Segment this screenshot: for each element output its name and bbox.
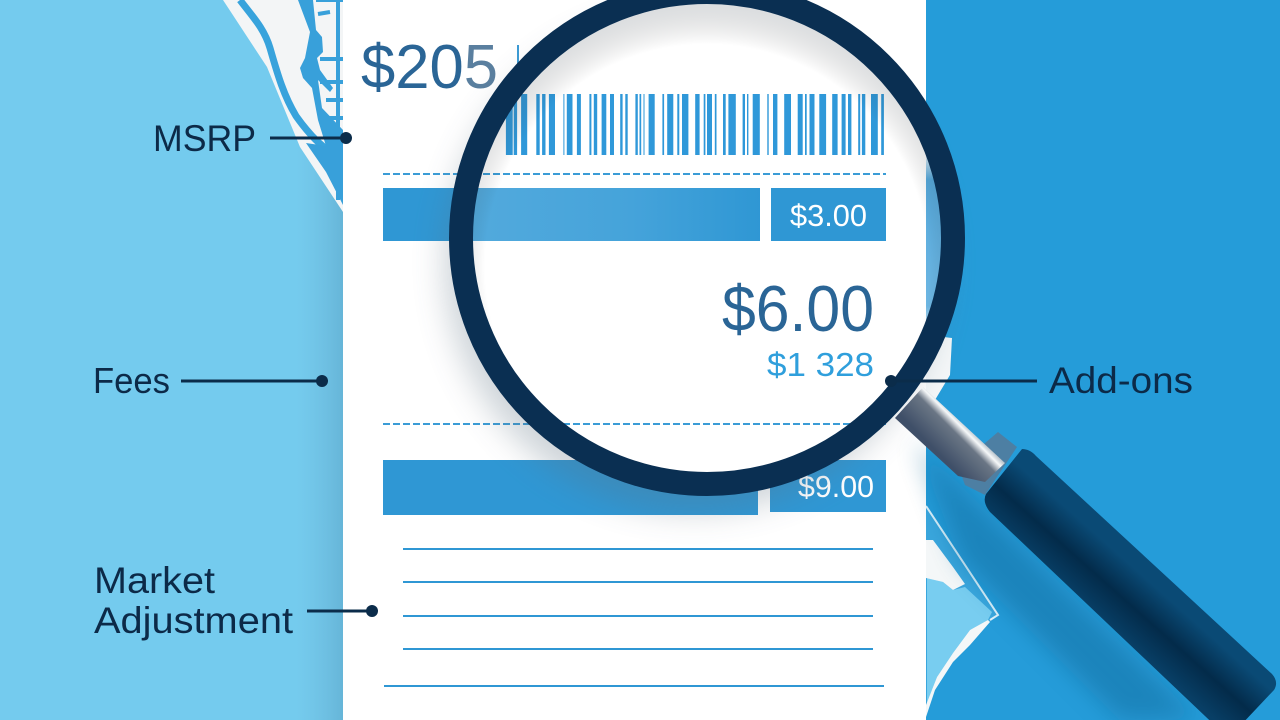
shadow: paper edge on left panel [296,0,343,720]
lens price tag [771,188,886,241]
secondary price: $1 328 [767,346,874,383]
lens tag value: $3.00: $3.00 [790,198,867,233]
handle collar [958,432,1017,495]
dashed divider upper [383,173,886,175]
panel: price sticker paper [343,0,926,720]
panel: light blue background left [0,0,343,720]
barcode stub [517,45,519,75]
torn paper: lower right [926,505,998,717]
torn paper: upper left [223,0,343,212]
lens contents [473,4,941,472]
bar: upper row [383,188,760,241]
ruled lines [384,549,884,686]
label: Add-ons: Add-ons [1049,360,1193,401]
lens bar [473,188,760,241]
label: Fees [93,360,328,401]
label: Market Adjustment: Adjustment [94,600,294,641]
lens edge shading [473,4,941,298]
label: Market Adjustment [94,560,378,641]
handle metal shaft [895,387,1005,482]
right panel seen through lens [926,156,941,320]
price tag: $9.00: $9.00 [798,469,874,504]
icon: magnifying glass handle [895,387,1276,720]
price heading: $205: $205 [361,33,498,102]
torn paper: behind lens right [926,335,952,422]
dashed divider lower [383,423,886,425]
handle grip [985,449,1276,720]
main price: $6.00: $6.00 [722,272,874,345]
panel: blue background right [926,0,1280,720]
label: Add-ons [885,360,1193,401]
magnifying glass ring [461,0,953,484]
lower dashed divider in lens [564,423,850,425]
bar: lower row [383,460,758,515]
label: Market Adjustment: Market [94,560,216,601]
handle drop shadow [915,440,1200,720]
lens background [471,2,943,474]
price tag: $9.00 [770,460,886,512]
magnifier drop shadow [444,12,944,512]
label: MSRP: MSRP [153,118,256,159]
label: Fees: Fees [93,360,170,401]
barcode [506,94,884,155]
dashed divider in lens [483,173,886,175]
label: MSRP [153,118,352,159]
